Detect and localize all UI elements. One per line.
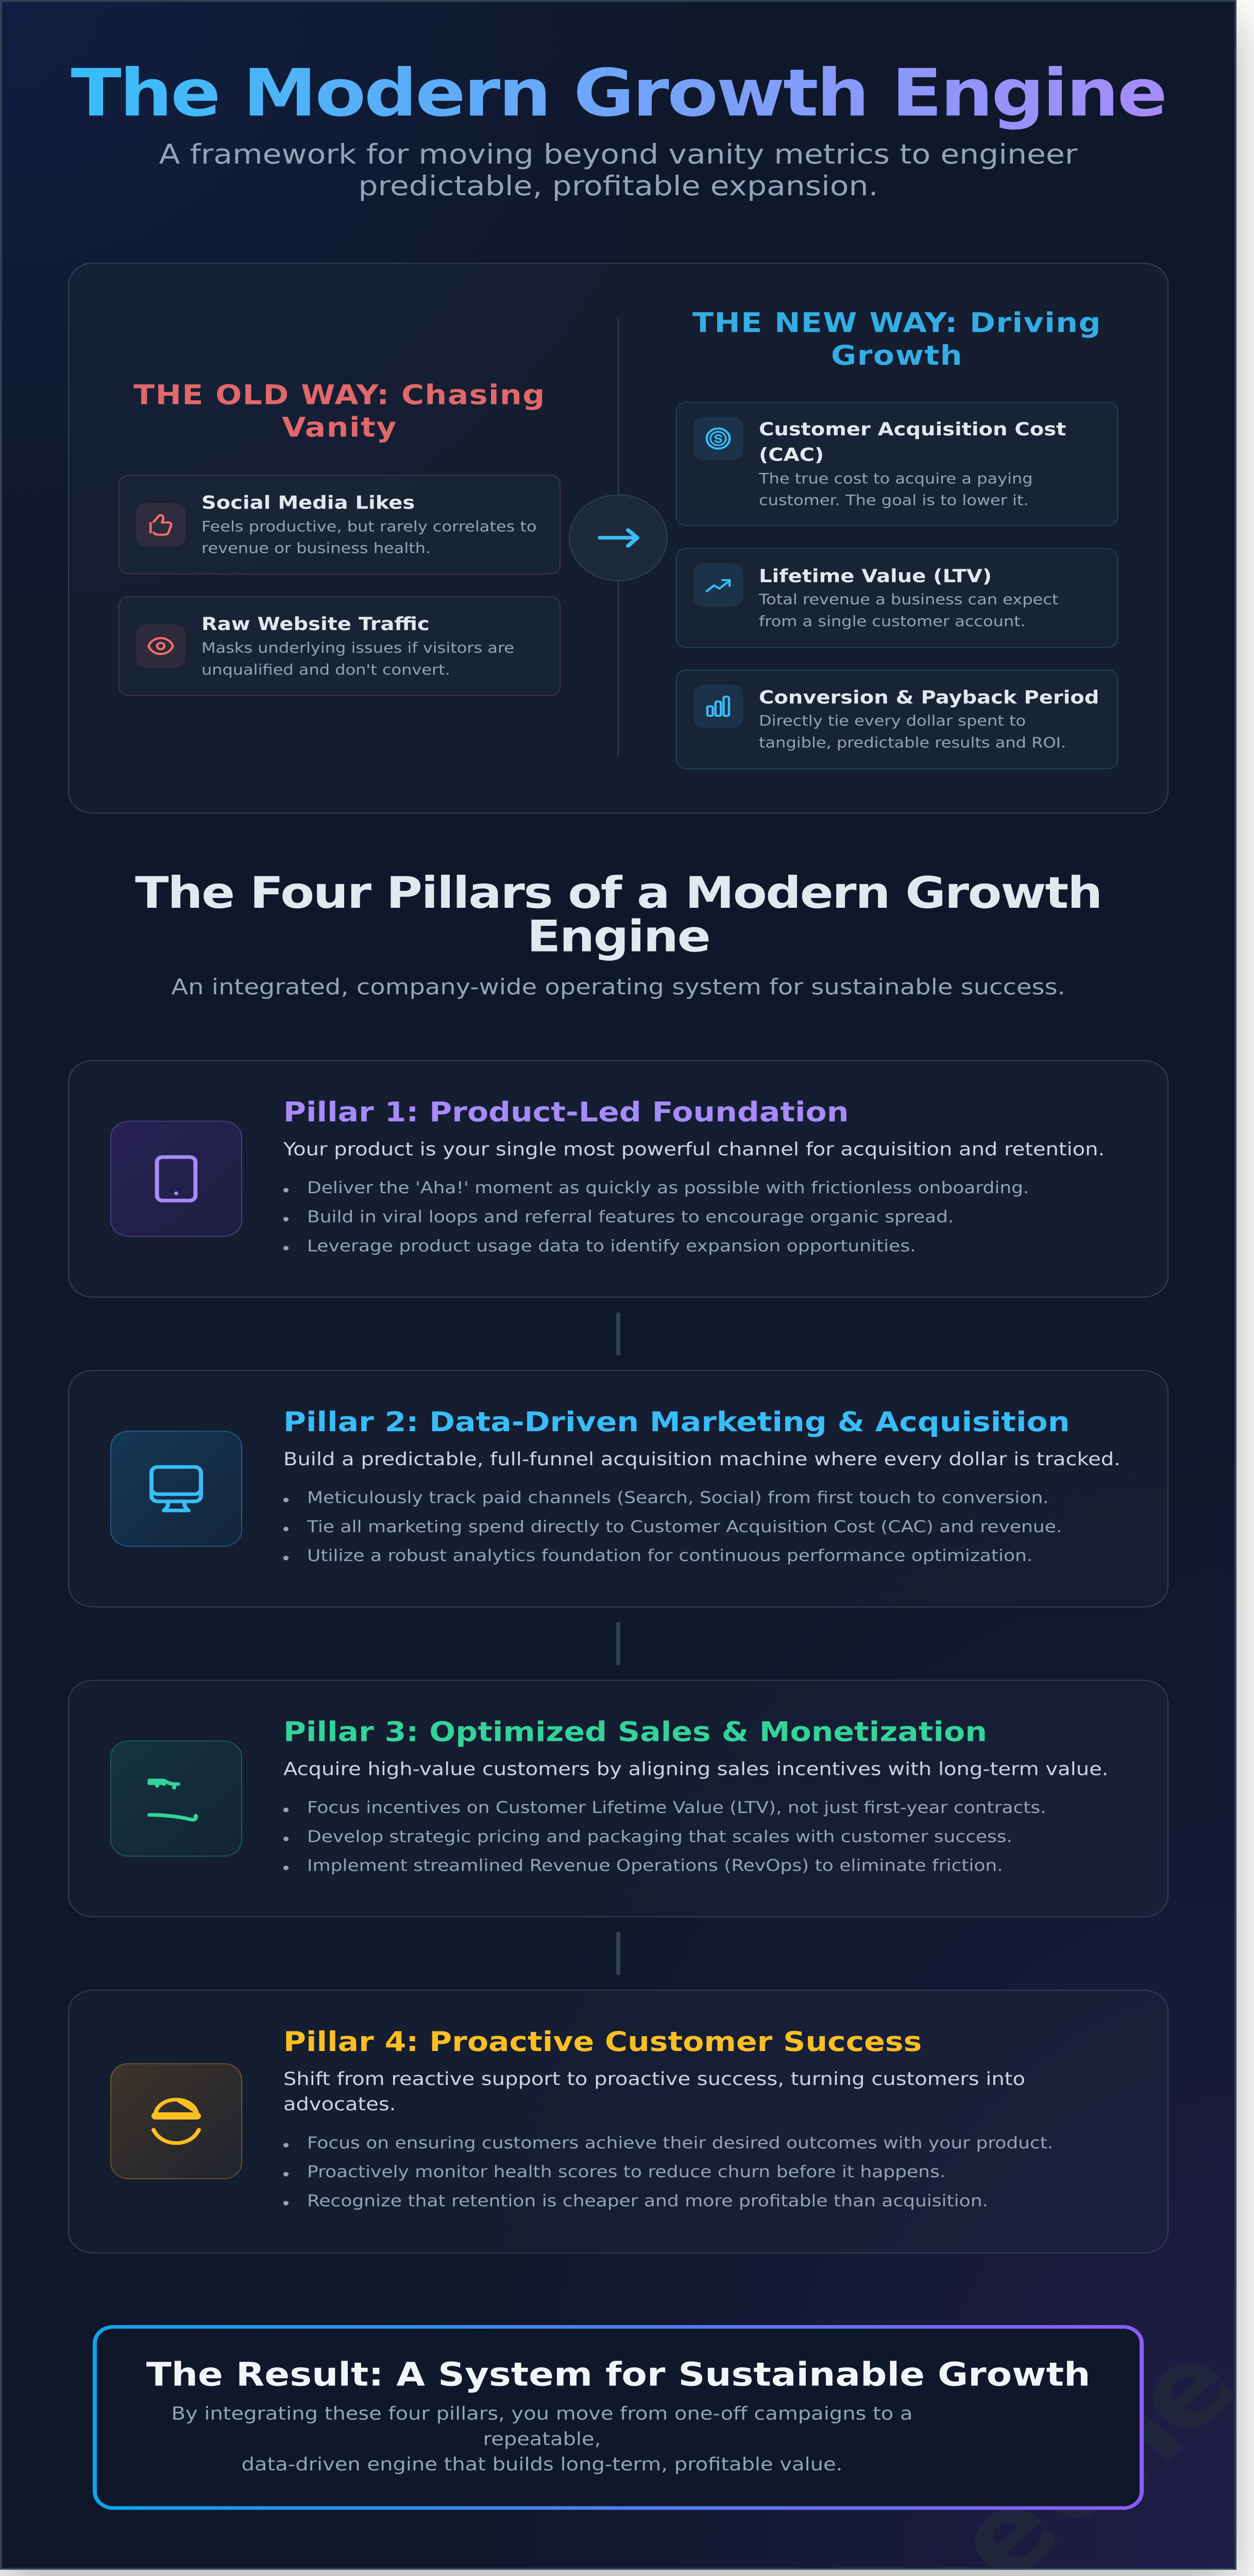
pillar 3 bullets: Develop strategic pricing and packaging that scales with customer success. xyxy=(307,1827,1012,1846)
pillar 3 bullets: Focus incentives on Customer Lifetime Value (LTV), not just first-year contracts. xyxy=(307,1799,1046,1817)
card: customer acquisition cost xyxy=(676,402,1118,526)
subtitle: A framework for moving beyond vanity metrics to engineer xyxy=(159,139,1077,171)
pillar 3 summary: Acquire high-value customers by aligning sales incentives with long-term value. xyxy=(283,1759,1108,1780)
result heading: The Result: A System for Sustainable Growth xyxy=(146,2355,1090,2394)
heading: new way: Growth xyxy=(831,340,963,371)
card description: Masks underlying issues if visitors are xyxy=(201,639,514,656)
card title: (CAC) xyxy=(759,445,824,465)
icon: phone xyxy=(110,1121,242,1237)
pillar 1 bullets: Deliver the 'Aha!' moment as quickly as possible with frictionless onboarding. xyxy=(307,1179,1029,1197)
panel: pillar 3 xyxy=(68,1680,1168,1917)
card description: Total revenue a business can expect xyxy=(759,591,1058,608)
result text: By integrating these four pillars, you move from one-off campaigns to a xyxy=(171,2403,912,2425)
pillar 1 title: Pillar 1: Product-Led Foundation xyxy=(283,1096,849,1128)
icon: trending up xyxy=(693,563,743,606)
icon: eye xyxy=(136,624,185,668)
pillar 1 bullets xyxy=(283,1179,1029,1256)
watermark: n xyxy=(1046,2370,1211,2515)
card description xyxy=(758,591,1058,630)
pillar 2 summary: Build a predictable, full-funnel acquisition machine where every dollar is tracked. xyxy=(283,1449,1121,1470)
callout: the result xyxy=(93,2325,1144,2510)
card: conversion and payback period xyxy=(676,670,1118,769)
vertical divider with arrow xyxy=(569,318,668,757)
heading: new way: THE NEW WAY: Driving xyxy=(692,307,1102,339)
panel: old way vs new way comparison xyxy=(68,263,1168,814)
section heading xyxy=(135,868,1102,962)
arrow circle xyxy=(569,494,668,581)
pillar 4 bullets: Focus on ensuring customers achieve their desired outcomes with your product. xyxy=(307,2134,1053,2153)
icon: broken glyph xyxy=(110,1740,242,1857)
pillar 4 summary: Shift from reactive support to proactive success, turning customers into xyxy=(283,2069,1025,2090)
pillar 4 summary: advocates. xyxy=(283,2094,396,2115)
card description: customer. The goal is to lower it. xyxy=(759,492,1029,509)
card title: Raw Website Traffic xyxy=(201,614,430,635)
pillar 4 title: Pillar 4: Proactive Customer Success xyxy=(283,2026,922,2058)
panel: pillar 2 xyxy=(68,1370,1168,1607)
pillar 4 bullets xyxy=(283,2134,1053,2211)
icon: arrow right xyxy=(598,528,639,548)
pillar 2 title: Pillar 2: Data-Driven Marketing & Acquisition xyxy=(283,1406,1070,1438)
card title xyxy=(759,419,1066,465)
card description xyxy=(201,639,514,678)
card description: revenue or business health. xyxy=(201,539,431,557)
pillar 3 bullets xyxy=(283,1799,1046,1875)
pillar 2 bullets: Utilize a robust analytics foundation for continuous performance optimization. xyxy=(307,1547,1032,1565)
pillar 4 bullets: Recognize that retention is cheaper and more profitable than acquisition. xyxy=(307,2192,988,2211)
card: social media likes xyxy=(118,475,561,574)
icon: thumbs up xyxy=(136,503,185,546)
card description: Directly tie every dollar spent to xyxy=(759,713,1026,730)
card title: Conversion & Payback Period xyxy=(759,687,1099,708)
result text: data-driven engine that builds long-term, profitable value. xyxy=(242,2454,842,2475)
panel: pillar 1 xyxy=(68,1060,1168,1297)
pillar 1 bullets: Leverage product usage data to identify expansion opportunities. xyxy=(307,1237,916,1256)
panel: pillar 4 xyxy=(68,1990,1168,2253)
pillar 3 bullets: Implement streamlined Revenue Operations (RevOps) to eliminate friction. xyxy=(307,1857,1003,1875)
pillar 4 bullets: Proactively monitor health scores to reduce churn before it happens. xyxy=(307,2163,945,2181)
heading: old way: Vanity xyxy=(282,412,397,444)
subtitle: predictable, profitable expansion. xyxy=(358,171,878,202)
watermark xyxy=(927,2319,1236,2570)
card: lifetime value xyxy=(676,548,1118,648)
icon: desktop monitor xyxy=(110,1431,242,1547)
card description xyxy=(759,713,1066,751)
pillar 2 bullets: Meticulously track paid channels (Search, Social) from first touch to conversion. xyxy=(307,1489,1049,1507)
pillar 1 summary: Your product is your single most powerful channel for acquisition and retention. xyxy=(283,1139,1105,1160)
pillar 3 title: Pillar 3: Optimized Sales & Monetization xyxy=(283,1716,987,1748)
card description: tangible, predictable results and ROI. xyxy=(759,734,1066,751)
section subheading: An integrated, company-wide operating system for sustainable success. xyxy=(171,975,1065,1000)
card title: Customer Acquisition Cost xyxy=(759,419,1066,440)
card description: from a single customer account. xyxy=(759,613,1026,630)
card description xyxy=(201,518,537,557)
pillar 2 bullets: Tie all marketing spend directly to Customer Acquisition Cost (CAC) and revenue. xyxy=(307,1518,1062,1536)
icon: bar chart xyxy=(693,685,743,728)
heading: old way: THE OLD WAY: Chasing xyxy=(133,379,546,411)
pillar 1 bullets: Build in viral loops and referral features to encourage organic spread. xyxy=(307,1208,954,1227)
card description: unqualified and don't convert. xyxy=(201,661,450,678)
title: The Modern Growth Engine xyxy=(71,55,1165,131)
section heading: The Four Pillars of a Modern Growth xyxy=(135,868,1102,918)
heading: new way xyxy=(692,307,1102,371)
section heading: Engine xyxy=(527,911,709,962)
icon: smile with dome xyxy=(110,2063,242,2179)
card description xyxy=(758,470,1033,509)
card title: Social Media Likes xyxy=(201,493,415,513)
icon: coin xyxy=(693,417,743,460)
watermark: o xyxy=(991,2407,1153,2550)
result text: repeatable, xyxy=(483,2429,601,2450)
card title: Lifetime Value (LTV) xyxy=(759,566,992,587)
subtitle xyxy=(159,139,1078,202)
result text xyxy=(171,2403,912,2475)
pillar 2 bullets xyxy=(283,1489,1062,1565)
card description: The true cost to acquire a paying xyxy=(759,470,1033,487)
card: raw website traffic xyxy=(118,596,561,696)
heading: old way xyxy=(133,379,546,444)
pillar 4 summary xyxy=(283,2069,1025,2115)
card description: Feels productive, but rarely correlates to xyxy=(201,518,537,535)
